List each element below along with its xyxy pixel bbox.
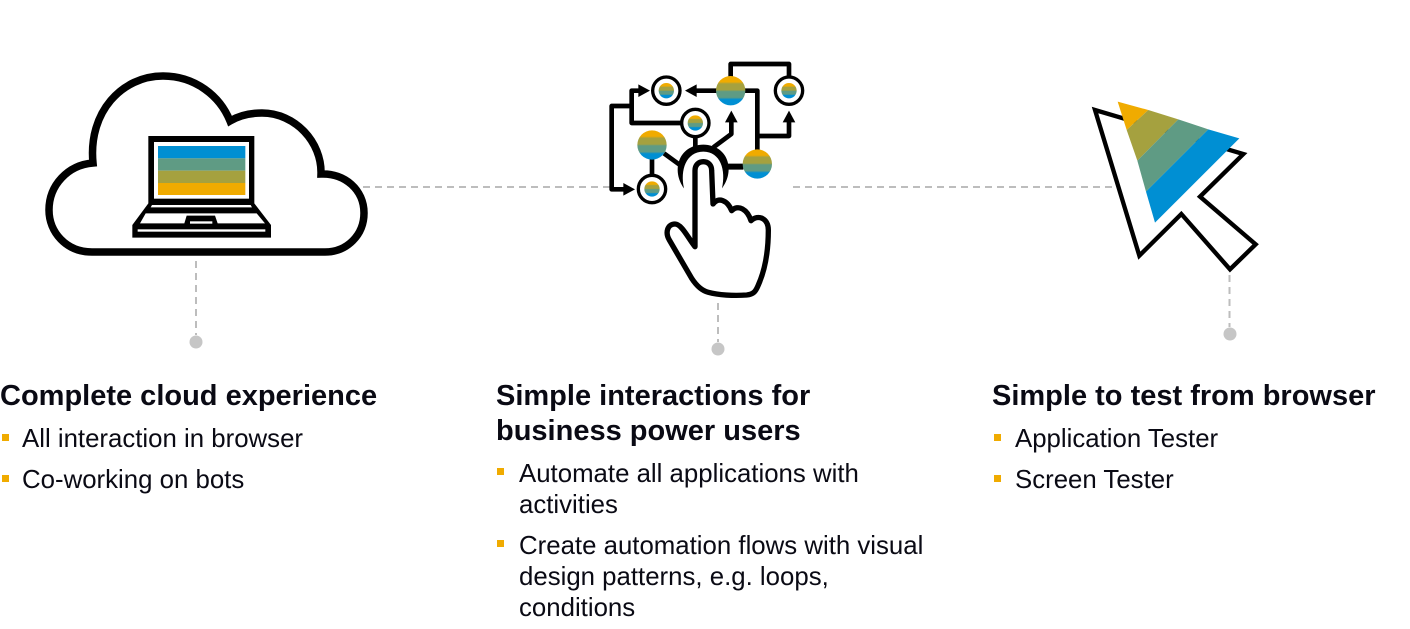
connector: cursor to third column (1224, 275, 1236, 340)
small ringed nodes (638, 77, 803, 203)
bullet list: Create automation flows with visual (519, 532, 923, 560)
heading: Complete cloud experience (0, 380, 377, 412)
bullet list (994, 425, 1219, 494)
bullet list: Application Tester (1015, 425, 1219, 453)
bullet list: Automate all applications with (519, 460, 859, 488)
panel: complete cloud experience (0, 380, 377, 494)
cursor outline (1095, 110, 1256, 269)
laptop (132, 136, 271, 238)
connector: hand to second column (712, 303, 724, 356)
bullet list: Screen Tester (1015, 466, 1174, 494)
arrowheads (623, 84, 795, 196)
touch crescent (678, 145, 729, 188)
bullet list: conditions (519, 594, 635, 622)
panel: simple to test (992, 380, 1376, 494)
connector: horizontal dashed line right (793, 186, 1118, 188)
heading: business power users (496, 415, 801, 447)
heading (496, 380, 810, 447)
cloud outline (49, 76, 364, 252)
heading: Simple to test from browser (992, 380, 1376, 412)
bullet list: Co-working on bots (22, 466, 244, 494)
icon: cursor arrow (1095, 102, 1256, 269)
bullet list: design patterns, e.g. loops, (519, 563, 829, 591)
bullet list: activities (519, 491, 618, 519)
striped triangle (1118, 102, 1239, 223)
hand (667, 162, 768, 295)
connector: horizontal dashed line left (363, 186, 610, 188)
bullet list (497, 460, 923, 622)
icon: cloud with laptop (49, 76, 364, 252)
panel: simple interactions (496, 380, 923, 622)
connector: cloud to first column (190, 261, 202, 348)
bullet list: All interaction in browser (22, 425, 303, 453)
flow lines (612, 64, 789, 189)
icon: hand touching process flow (612, 64, 803, 295)
large striped nodes (637, 76, 772, 179)
heading: Simple interactions for (496, 380, 810, 412)
bullet list (2, 425, 303, 494)
